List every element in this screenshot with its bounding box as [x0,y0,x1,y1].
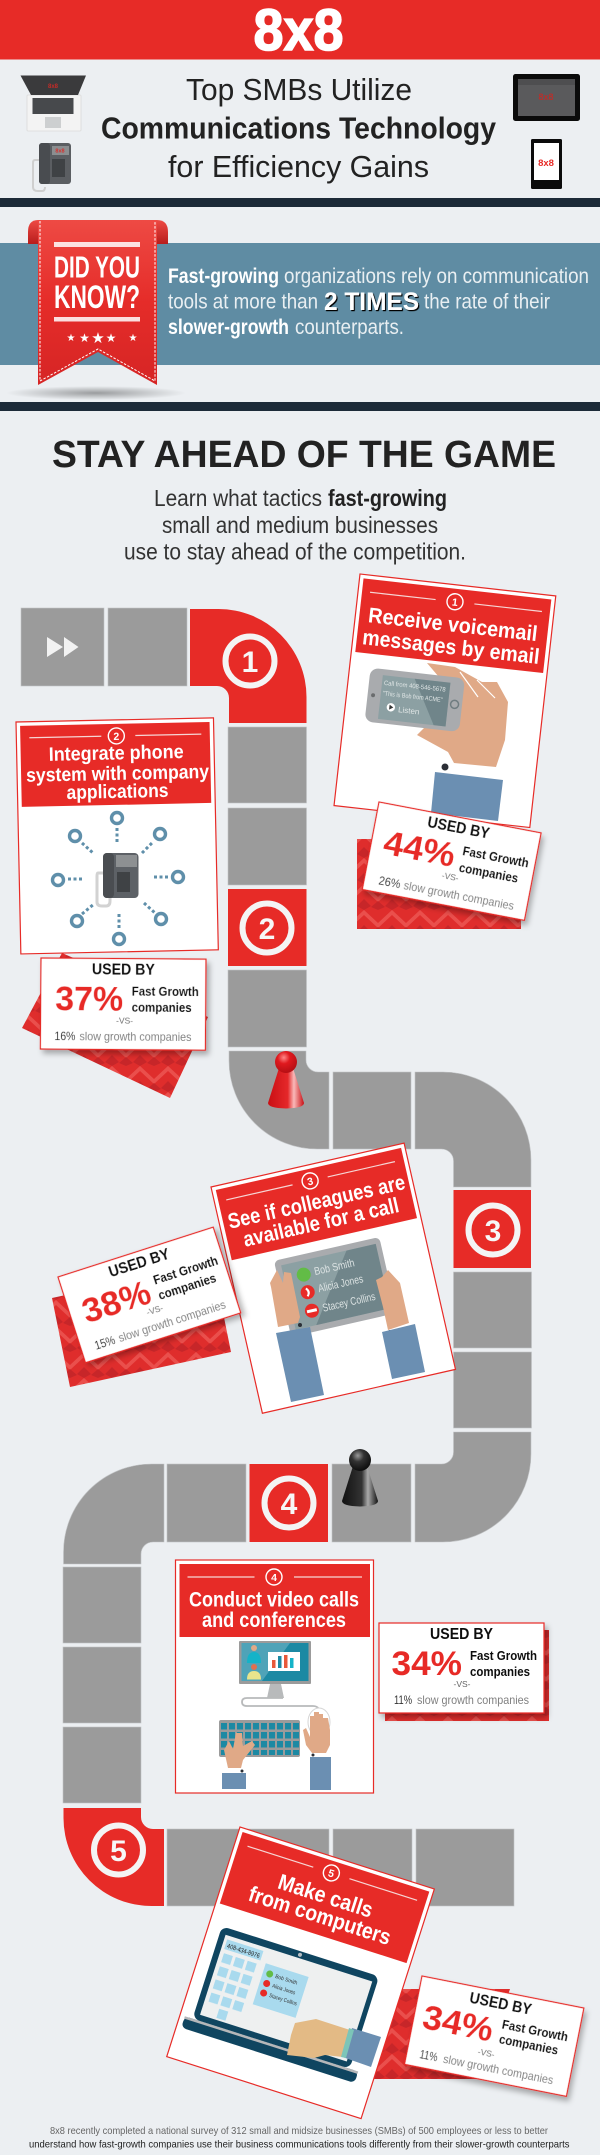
icon: laptop softphone: Stacey Collins [268,1993,298,2008]
header band: 8x8 logo [0,0,600,63]
main card 4: 4 [271,1572,277,1584]
icon: laptop softphone: Alicia Jones [271,1983,296,1997]
step 2 tile [228,889,306,966]
stat card 4: 34% [392,1645,462,1683]
panel: card 3 presence [52,1143,455,1413]
panel: card 5 computer calls [167,1827,584,2119]
stat card 3: 38% [77,1274,156,1331]
icon: tablet: 8x8 [538,92,554,102]
step 5 corner tile [63,1808,164,1906]
ribbon: did you know: DID YOU [54,250,140,284]
intro text: fast-growing [328,485,447,511]
ribbon: did you know: ★ [79,331,90,345]
stat card 2: USED BY [92,961,155,979]
icon: phone screen: "This is Bob from ACME" [382,690,443,704]
intro text: small and medium businesses [162,512,438,538]
icon: smartphone [531,139,562,189]
stat card 4: USED BY [430,1626,493,1643]
icon: tablet with contacts: Bob Smith [313,1257,356,1278]
icon: tablet with contacts: Alicia Jones [317,1273,365,1295]
step 1 corner tile: 1 [242,646,258,679]
panel: card 4 video calls [176,1560,549,1793]
ribbon: did you know: ★ [67,333,76,344]
stat card 3 [58,1227,241,1363]
patterned backing 3 [52,1263,231,1387]
main card 2: applications [66,780,169,804]
divider band [0,402,600,411]
main card 3: available for a call [241,1193,401,1252]
start tile with fast-forward icon [21,608,104,686]
main card 5: Make calls [275,1869,376,1923]
heading: stay ahead of the game: STAY AHEAD OF THE GAME [52,434,556,476]
stat card 2 [40,958,206,1050]
title: for Efficiency Gains [168,149,429,184]
stat card 5: companies [498,2031,560,2058]
did you know statement: tools at more than [168,290,318,314]
title: Top SMBs Utilize [186,72,412,107]
main card 3 [211,1143,455,1413]
main card 4: and conferences [202,1608,346,1632]
main card 3: 3 [306,1175,315,1188]
panel: card 2 phone integration [16,718,218,1098]
ribbon: did you know [6,220,186,400]
stat card 5: -VS- [477,2046,496,2060]
main card 4 [176,1560,374,1793]
stat card 4: Fast Growth [470,1648,537,1663]
patterned backing 2 [22,953,208,1098]
did you know statement: Fast-growing [168,265,279,288]
step 2 tile: 2 [259,913,275,946]
icon: desk phone [33,143,71,191]
icon: laptop softphone [181,1924,388,2083]
stat card 2: -VS- [116,1016,133,1026]
stat card 1: -VS- [441,870,460,883]
stat card 4: -VS- [454,1679,471,1689]
stat card 4: slow growth companies [417,1693,529,1707]
icon: connected desk phone [52,812,184,944]
icon: hand on laptop [287,2019,381,2067]
icon: phone screen: Listen [398,705,420,716]
stat card 5: USED BY [468,1990,533,2019]
icon: video conference monitor and keyboard [219,1641,331,1790]
panel: card 1 voicemail [334,574,556,929]
did you know statement [168,265,589,339]
footer note [29,2125,570,2150]
ribbon: did you know: ★ [91,330,105,347]
patterned backing 4 [385,1630,549,1721]
stat card 3: 15% [93,1333,117,1353]
stat card 3: -VS- [145,1303,165,1317]
did you know statement: the rate of their [424,290,550,314]
stat card 1: slow growth companies [403,878,515,913]
main card 5: from computers [246,1881,394,1950]
main card 3: See if colleagues are [226,1170,407,1234]
icon: tablet [513,74,580,121]
stat card 3: Fast Growth [151,1253,220,1288]
stat card 2: 16% [54,1029,76,1043]
stat card 3: companies [156,1270,218,1303]
stat card 5: 11% [418,2047,439,2064]
icon: tablet with contacts: Stacey Collins [321,1291,377,1315]
icon: tablet with contacts [274,1237,397,1337]
footer note: 8x8 recently completed a national survey of 312 small and midsize businesses (SMBs) of 500 employees or less to better [50,2125,548,2137]
ribbon: did you know: ★ [129,333,138,344]
main card 5: 5 [326,1867,336,1881]
main card 1 [334,574,556,828]
main card 1: 1 [451,596,459,609]
did you know band [0,243,600,365]
stat card 4 [379,1623,544,1713]
main card 2 [16,718,218,954]
icon: hand behind phone [417,663,508,821]
main card 4: Conduct video calls [189,1588,359,1612]
stat card 1: 44% [380,824,458,875]
stat card 5 [405,1976,584,2096]
icon: hands and sleeves [270,1270,425,1402]
stat card 5: Fast Growth [501,2017,569,2044]
patterned backing 1 [357,839,521,929]
title: Communications Technology [101,110,497,146]
black game pawn [342,1449,378,1506]
stat card 1: Fast Growth [461,843,530,871]
stat card 3: USED BY [107,1246,172,1281]
did you know statement: counterparts. [295,316,404,339]
stat card 3: slow growth companies [117,1297,227,1345]
intro text [124,485,466,564]
icon: laptop softphone: Bob Smith [274,1974,298,1987]
intro text: use to stay ahead of the competition. [124,538,466,564]
step 5 corner tile: 5 [110,1835,127,1868]
stat card 2: slow growth companies [79,1029,192,1044]
stat card 2: 37% [55,980,123,1019]
intro text: Learn what tactics [154,485,322,511]
main card 1: Receive voicemail [367,603,539,646]
step 3 tile: 3 [485,1215,501,1248]
step 4 tile: 4 [281,1488,298,1521]
icon: phone screen: Call from 408-546-5678 [384,680,446,694]
icon: desk phone: 8x8 [55,148,65,154]
did you know statement: slower-growth [168,316,289,339]
stat card 1: companies [458,860,520,886]
stat card 1: USED BY [426,814,491,843]
title [101,72,497,184]
icon: smartphone: 8x8 [538,158,554,169]
main card 1: messages by email [361,625,541,669]
stat card 5: slow growth companies [442,2052,555,2087]
icon: phone screen [365,668,465,732]
stat card 1 [362,802,541,920]
icon: laptop [20,76,86,131]
game board path [21,608,532,1906]
main card 2: 2 [113,731,120,743]
red game pawn [268,1051,304,1108]
stat card 2: companies [132,1000,192,1015]
stat card 1: 26% [378,873,402,891]
stat card 2: Fast Growth [132,984,199,999]
did you know statement: 2 TIMES [324,288,419,316]
main card 2: Integrate phone [48,741,184,766]
icon: laptop softphone: 408-434-8976 [226,1943,261,1960]
patterned backing 5 [373,1989,510,2079]
stat card 5: 34% [419,1998,496,2049]
ribbon: did you know: KNOW? [54,279,140,315]
stat card 4: companies [470,1664,530,1679]
divider band [0,198,600,207]
main card 2: system with company [26,761,209,787]
step 3 tile [454,1190,531,1268]
ribbon: did you know: ★ [106,331,116,345]
stat card 4: 11% [394,1693,412,1707]
step 1 corner tile [190,609,306,723]
step 4 tile [250,1464,328,1542]
main card 5 [167,1827,434,2119]
icon: laptop: 8x8 [48,84,59,90]
